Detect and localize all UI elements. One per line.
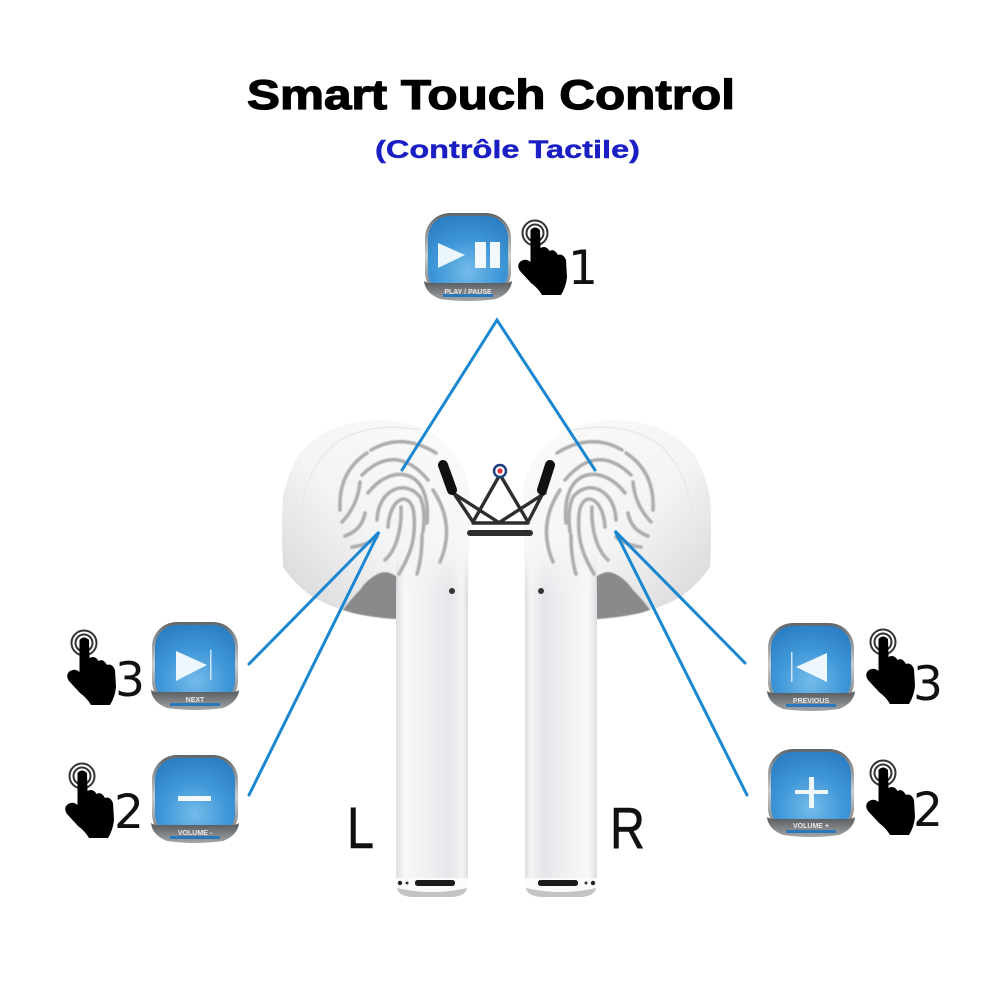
- title: Smart Touch Control: [247, 71, 735, 118]
- icon: tap twice left: [65, 764, 114, 838]
- button: previous: [767, 623, 855, 711]
- subtitle: (Contrôle Tactile): [375, 136, 640, 164]
- label R: R: [610, 796, 645, 861]
- right earbud: [523, 420, 711, 897]
- number 1: 1: [568, 241, 598, 296]
- number 2 left: 2: [114, 785, 144, 840]
- crown logo: [443, 465, 550, 533]
- number 3 right: 3: [913, 657, 943, 712]
- button: volume minus: [151, 755, 239, 843]
- left earbud: [282, 420, 470, 897]
- button: next: [151, 622, 239, 710]
- button: previous: PREVIOUS: [793, 698, 829, 705]
- icon: tap once: [518, 220, 567, 295]
- label L: L: [347, 796, 374, 861]
- number 2 right: 2: [913, 783, 943, 838]
- icon: tap three times left: [67, 630, 116, 705]
- icon: tap twice right: [866, 760, 915, 835]
- button: play / pause: [424, 213, 512, 301]
- number 3 left: 3: [115, 653, 145, 708]
- icon: tap three times right: [866, 630, 915, 704]
- button: volume plus: [767, 749, 855, 837]
- button: volume minus: VOLUME -: [178, 830, 213, 837]
- button: volume plus: VOLUME +: [793, 823, 829, 830]
- button: play / pause: PLAY / PAUSE: [444, 289, 492, 296]
- connector lines: [249, 320, 747, 795]
- button: next: NEXT: [186, 697, 205, 704]
